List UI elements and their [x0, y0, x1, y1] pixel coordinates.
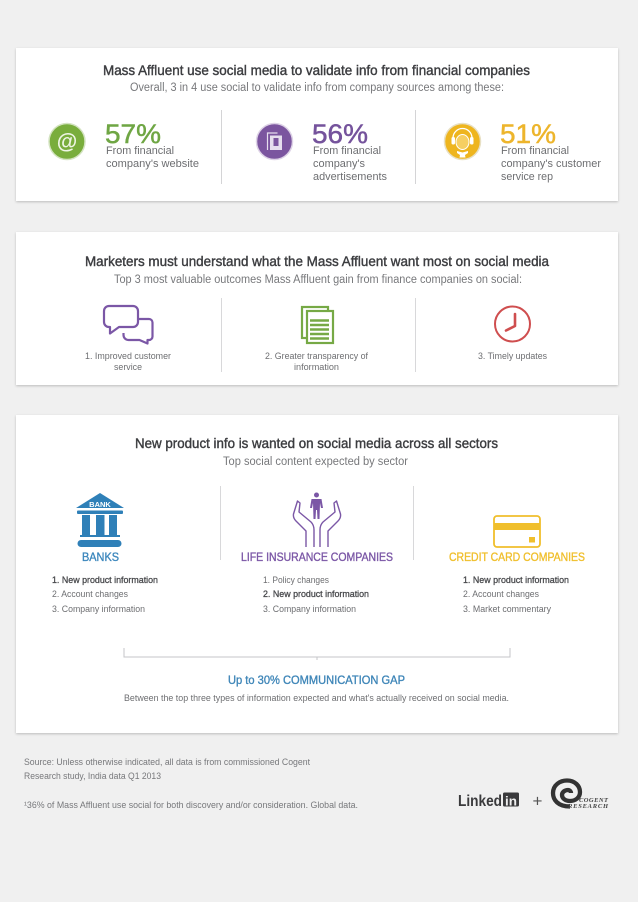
list: credit card: [463, 575, 569, 614]
label: banks: BANKS: [82, 550, 119, 564]
source note: [24, 757, 358, 810]
bracket: [124, 648, 510, 660]
list: life insurance: [263, 575, 369, 614]
label: greater transparency: [265, 351, 368, 372]
plus sign: +: [533, 792, 543, 810]
list: life insurance: 2. New product information: [263, 589, 369, 599]
icon: customer service headset: [444, 124, 480, 160]
logo: LinkedIn: in: [505, 794, 517, 808]
icon: bank: [76, 493, 124, 547]
list: life insurance: 1. Policy changes: [263, 575, 329, 585]
stat: 51%: 51%: [500, 119, 556, 149]
stat: 56%: 56%: [312, 119, 368, 149]
icon: bank: BANK: [89, 500, 111, 509]
panel: validate info from financial companies: [16, 48, 618, 201]
text: from company advertisements: From financial: [313, 145, 381, 157]
icon: speech bubbles: [104, 306, 152, 344]
label: credit card companies: CREDIT CARD COMPANIES: [449, 550, 585, 564]
panel: new product info by sector: [16, 415, 618, 733]
label: improved customer service: service: [114, 362, 142, 372]
text: from company customer service rep: service rep: [501, 171, 553, 183]
stat: 57%: 57%: [105, 119, 161, 149]
heading: panel 2: Marketers must understand what the Mass Affluent want most on social media: [85, 253, 549, 269]
icon: advertisements: [256, 124, 292, 160]
panel: what the Mass Affluent want most: [16, 232, 618, 385]
label: timely updates: 3. Timely updates: [478, 351, 547, 361]
heading: panel 3: New product info is wanted on social media across all sectors: [135, 435, 498, 451]
icon: clock: [495, 306, 530, 342]
text: from company customer service rep: From financial: [501, 145, 569, 157]
text: from company customer service rep: company's customer: [501, 158, 601, 170]
logo: Cogent Research: RESEARCH: [567, 803, 609, 810]
heading: panel 1: Mass Affluent use social media to validate info from financial companies: [103, 62, 530, 78]
list: credit card: 1. New product information: [463, 575, 569, 585]
label: greater transparency: information: [294, 362, 339, 372]
source note: Research study, India data Q1 2013: [24, 771, 161, 781]
list: life insurance: 3. Company information: [263, 604, 356, 614]
list: banks: 2. Account changes: [52, 589, 128, 599]
subheading: panel 1: Overall, 3 in 4 use social to validate info from company sources among these:: [130, 82, 504, 94]
logo: Cogent Research: COGENT: [579, 797, 609, 804]
icon: documents: [302, 307, 333, 343]
list: banks: 3. Company information: [52, 604, 145, 614]
label: greater transparency: 2. Greater transparency of: [265, 351, 368, 361]
list: credit card: 3. Market commentary: [463, 604, 551, 614]
label: improved customer service: 1. Improved customer: [85, 351, 171, 361]
icon: hands holding person: [293, 492, 341, 547]
icon: at sign: @: [57, 130, 77, 154]
subheading: panel 3: Top social content expected by sector: [223, 456, 408, 468]
logo: Cogent Research: [553, 780, 609, 810]
source note: ¹36% of Mass Affluent use social for both discovery and/or consideration. Global data.: [24, 800, 358, 810]
text: from company customer service rep: [501, 145, 601, 183]
text: from company website: company's website: [106, 158, 199, 170]
icon: at sign: [49, 124, 85, 160]
text: from company website: From financial: [106, 145, 174, 157]
subheading: panel 2: Top 3 most valuable outcomes Mass Affluent gain from finance companies on social:: [114, 274, 522, 286]
label: improved customer service: [85, 351, 171, 372]
text: from company advertisements: company's: [313, 158, 365, 170]
callout: communication gap: Up to 30% COMMUNICATION GAP: [228, 673, 405, 687]
text: from company website: [106, 145, 199, 170]
list: banks: [52, 575, 158, 614]
list: credit card: 2. Account changes: [463, 589, 539, 599]
label: life insurance companies: LIFE INSURANCE COMPANIES: [241, 550, 393, 564]
icon: credit card: [494, 516, 540, 547]
source note: Source: Unless otherwise indicated, all data is from commissioned Cogent: [24, 757, 310, 767]
logo: LinkedIn: Linked: [458, 793, 502, 810]
text: gap explanation: Between the top three types of information expected and what's actually received on social media.: [124, 693, 509, 703]
text: from company advertisements: advertisements: [313, 171, 387, 183]
list: banks: 1. New product information: [52, 575, 158, 585]
text: from company advertisements: [313, 145, 387, 183]
